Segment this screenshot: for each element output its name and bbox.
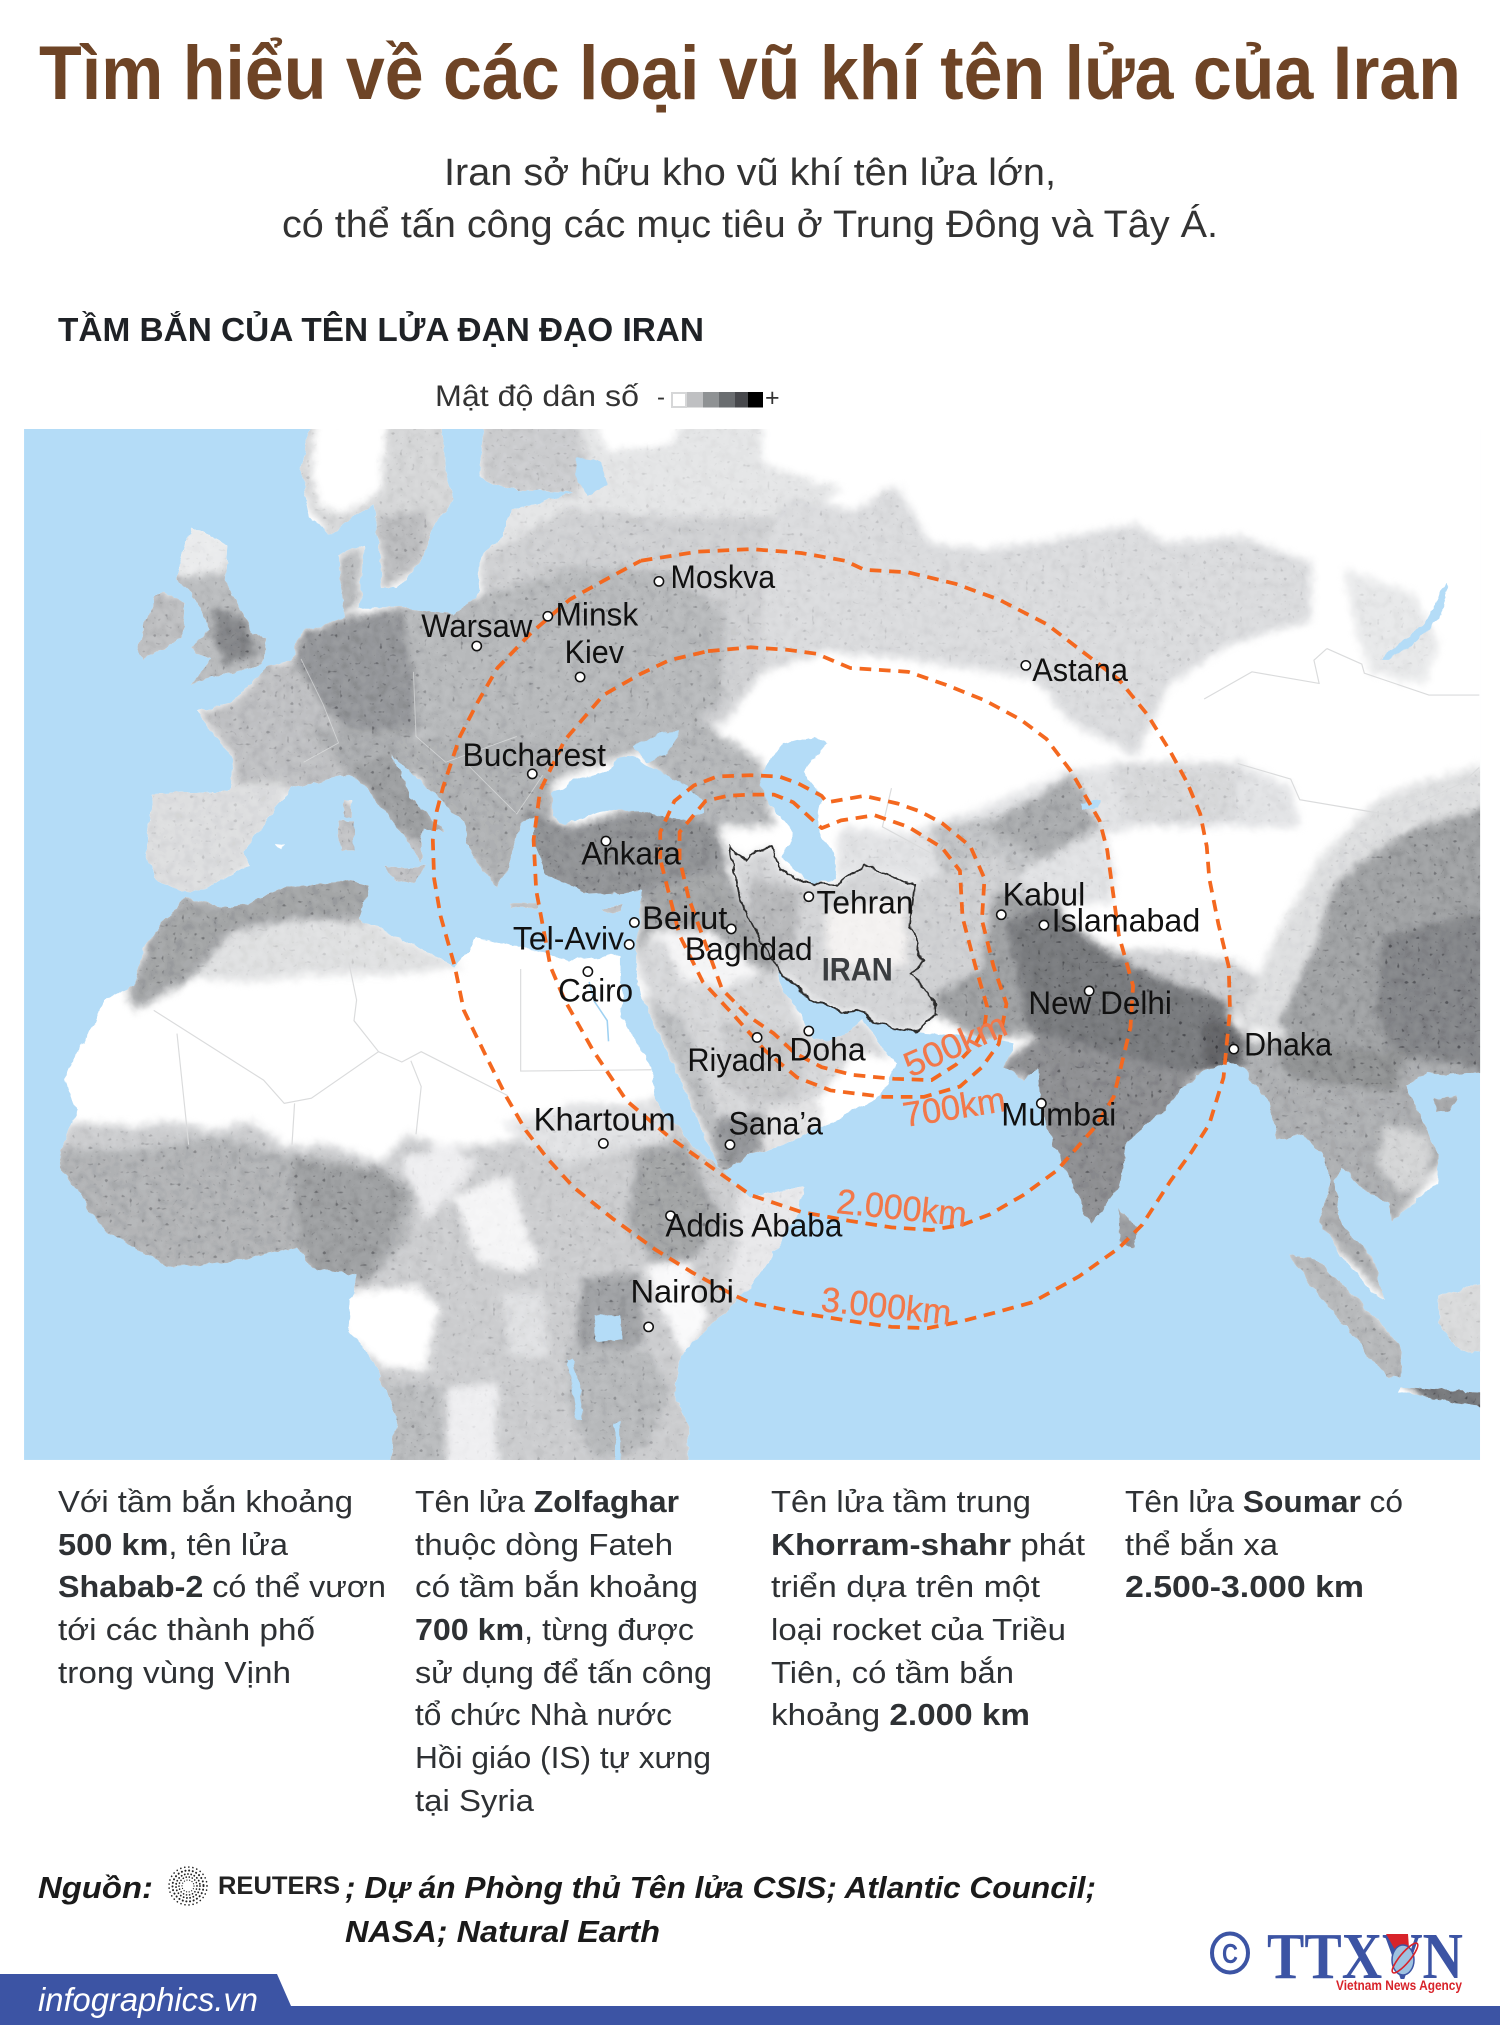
TTXVN logo: C [1222,1938,1238,1969]
text column 2: Zolfaghar: tổ chức Nhà nước [415,1697,672,1732]
range labels: 2.000km [835,1182,969,1234]
icon: Reuters logo: REUTERS [218,1872,340,1900]
city markers and labels [421,559,1332,1332]
text column 4: Soumar: 2.500-3.000 km [1125,1569,1364,1604]
range line: 3000 km [433,549,1230,1328]
text column 2: Zolfaghar: Hồi giáo (IS) tự xưng [415,1740,711,1775]
TTXVN logo: Vietnam News Agency [1336,1978,1462,1993]
Iran outline [730,846,937,1032]
TTXVN logo: TTXVN [1267,1920,1463,1993]
text column 1: Shabab-2: Shabab-2 có thể vươn [58,1569,386,1604]
city markers and labels: Warsaw [421,608,533,644]
inner seas and lakes [553,457,1448,1460]
city markers and labels: Kabul [1003,877,1085,913]
population density shading [52,388,1500,1499]
city markers and labels: New Delhi [1028,985,1172,1021]
text column 2: Zolfaghar [415,1484,712,1818]
range line: 500 km [680,795,987,1080]
city markers and labels: Riyadh [687,1042,783,1078]
city markers and labels: Islamabad [1052,903,1200,939]
city markers and labels: Tel-Aviv [513,921,625,957]
text column 3: Khorram-shahr: triển dựa trên một [771,1569,1040,1604]
text column 3: Khorram-shahr: Tiên, có tầm bắn [771,1655,1014,1690]
subtitle: có thể tấn công các mục tiêu ở Trung Đông và Tây Á. [282,203,1218,246]
map heading: TẦM BẮN CỦA TÊN LỬA ĐẠN ĐẠO IRAN [58,311,704,348]
text column 2: Zolfaghar: tại Syria [415,1783,535,1818]
legend: population density [435,380,780,413]
text column 2: Zolfaghar: sử dụng để tấn công [415,1655,712,1690]
city markers and labels: Moskva [671,559,775,595]
city markers and labels: Beirut [642,900,727,936]
city markers and labels: Sana’a [729,1105,823,1141]
city markers and labels: Doha [789,1032,866,1068]
text column 4: Soumar: thể bắn xa [1125,1527,1279,1562]
map panel [24,388,1500,1499]
source credits [38,1870,1096,1949]
source credits: ; Dự án Phòng thủ Tên lửa CSIS; Atlantic Council; [345,1870,1096,1905]
footer band [0,1974,1500,2025]
city markers and labels: Mumbai [1001,1096,1116,1132]
text column 1: Shabab-2 [58,1484,386,1690]
text column 1: Shabab-2: 500 km, tên lửa [58,1527,289,1562]
text column 3: Khorram-shahr: loại rocket của Triều [771,1612,1066,1647]
range labels: 3.000km [819,1280,953,1333]
city markers and labels: Kiev [565,634,625,670]
icon: Reuters logo [169,1867,340,1905]
text column 1: Shabab-2: tới các thành phố [58,1612,315,1647]
city markers and labels: Minsk [556,596,639,632]
range labels [822,1018,1008,1325]
legend: population density: - [657,384,665,411]
text column 2: Zolfaghar: Tên lửa Zolfaghar [415,1484,679,1519]
land base [59,407,1500,1486]
subtitle: Iran sở hữu kho vũ khí tên lửa lớn, [444,152,1056,194]
TTXVN logo [1212,1920,1463,1993]
country label: Iran: IRAN [822,952,893,988]
river Nile [589,982,609,1041]
range line: 700 km [660,775,1006,1097]
city markers and labels: Addis Ababa [665,1207,842,1243]
text column 3: Khorram-shahr: Khorram-shahr phát [771,1527,1085,1562]
legend: population density: + [765,384,780,412]
city markers and labels: Nairobi [630,1273,734,1309]
text column 3: Khorram-shahr [771,1484,1085,1732]
city markers and labels: Khartoum [534,1101,676,1137]
source credits: NASA; Natural Earth [345,1914,660,1949]
range line: 2000 km [534,647,1133,1230]
city markers and labels: Dhaka [1244,1027,1332,1063]
text column 3: Khorram-shahr: khoảng 2.000 km [771,1697,1030,1732]
city markers and labels: Tehran [817,884,913,920]
city markers and labels: Baghdad [685,931,813,967]
text column 2: Zolfaghar: thuộc dòng Fateh [415,1527,673,1562]
range labels: 700km [900,1080,1008,1135]
city markers and labels: Astana [1032,652,1128,688]
range labels: 500km [898,1005,1013,1085]
text column 1: Shabab-2: Với tầm bắn khoảng [58,1484,353,1519]
source credits: Nguồn: [38,1870,153,1905]
text column 2: Zolfaghar: 700 km, từng được [415,1612,694,1647]
text column 3: Khorram-shahr: Tên lửa tầm trung [771,1484,1031,1519]
city markers and labels: Bucharest [463,737,606,773]
legend: population density: Mật độ dân số [435,380,639,413]
text column 1: Shabab-2: trong vùng Vịnh [58,1655,291,1690]
footer band: infographics.vn [38,1981,258,2018]
city markers and labels: Ankara [581,835,681,871]
city markers and labels: Cairo [558,972,633,1008]
text column 2: Zolfaghar: có tầm bắn khoảng [415,1569,698,1604]
text column 4: Soumar: Tên lửa Soumar có [1125,1484,1403,1519]
subtitle [282,152,1218,246]
text column 4: Soumar [1125,1484,1403,1604]
country borders [154,649,1479,1145]
